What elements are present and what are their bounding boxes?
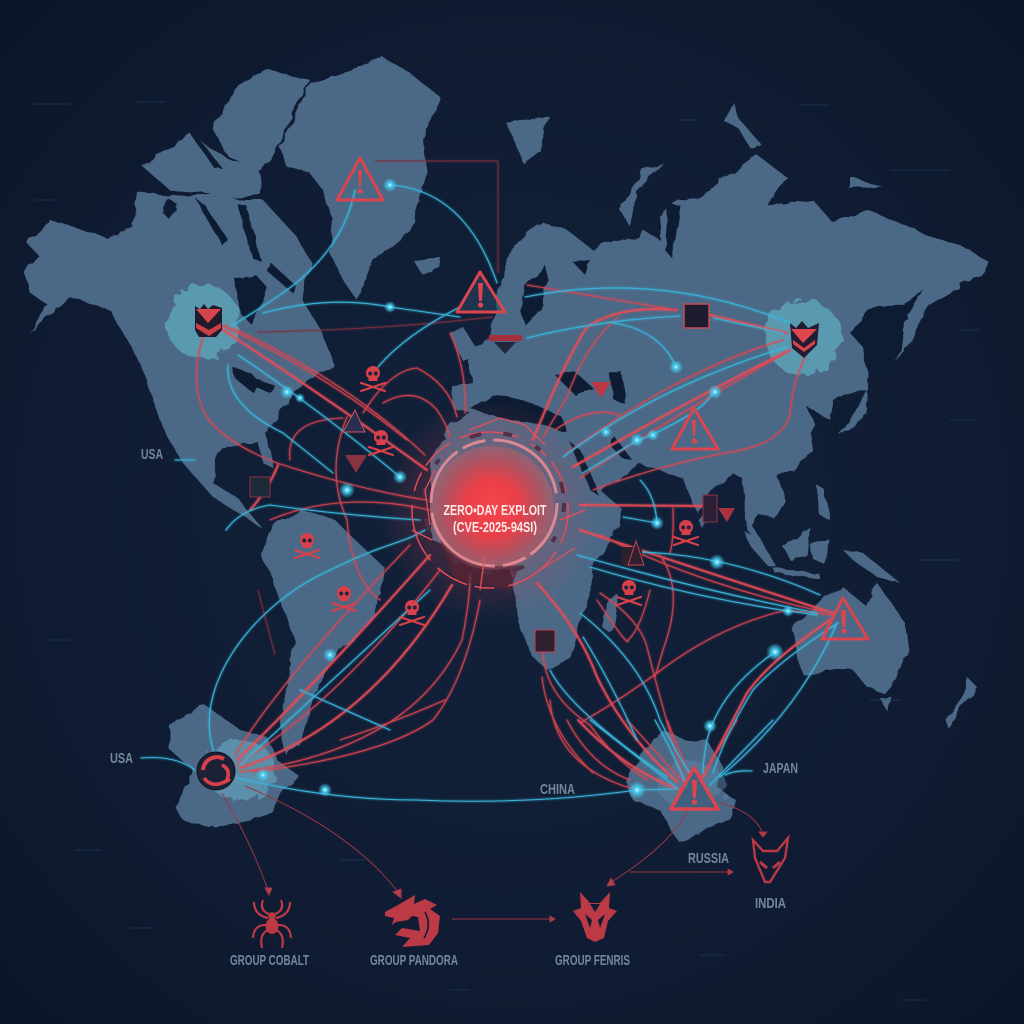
threat badge: North America <box>195 304 222 337</box>
arrow to Group Pandora <box>245 786 401 898</box>
continents <box>24 57 990 843</box>
threat badge: Asia <box>790 321 819 358</box>
marker: Atlantic diamond <box>343 410 365 432</box>
marker: Caucasus triangle <box>591 382 611 398</box>
route nodes <box>256 178 794 799</box>
central exploit burst <box>412 418 585 590</box>
Africa <box>430 405 623 670</box>
warning: southeast hub <box>671 768 718 809</box>
Hudson Bay <box>234 276 265 325</box>
connector arrows <box>222 786 767 922</box>
Great Lakes <box>232 367 275 392</box>
marker: Europe <box>489 335 522 354</box>
arrow to Group Fenris <box>607 812 687 886</box>
skull: Indian Ocean <box>674 520 698 545</box>
marker: East Africa square <box>622 541 644 566</box>
group icons <box>253 838 788 948</box>
CVE identifier: (CVE-2025-94SI) <box>453 520 537 536</box>
arrow to India fox <box>720 803 767 837</box>
core <box>430 446 554 570</box>
Madagascar <box>602 593 618 633</box>
skull: Mid Atlantic <box>369 430 393 455</box>
Sri Lanka <box>700 516 708 529</box>
arrow near Russia label <box>630 869 733 875</box>
attack routes: cyan <box>141 185 838 801</box>
marker: Africa square <box>535 630 555 652</box>
hub glow: North America <box>166 285 240 359</box>
New Zealand <box>946 677 978 728</box>
New Guinea <box>843 550 900 583</box>
hub glow: Asia <box>765 299 841 375</box>
South America <box>262 510 385 755</box>
Severnaya Zemlya <box>723 102 760 148</box>
southeast landmass <box>627 730 738 843</box>
label: Group Cobalt: GROUP COBALT <box>230 952 309 969</box>
Ellesmere Island <box>213 70 310 172</box>
southwest landmass <box>170 705 300 828</box>
skull: Brazil north <box>295 533 319 558</box>
lower shadow <box>440 540 520 590</box>
outer broken ring <box>412 432 568 588</box>
marker: Caribbean square <box>250 477 270 497</box>
skull: Madagascar <box>617 580 641 605</box>
Novaya Zemlya <box>620 163 663 227</box>
Kara Sea inlet <box>665 205 680 258</box>
skull: Brazil south <box>332 586 356 611</box>
warning: Australia <box>822 598 868 639</box>
label: India: INDIA <box>755 895 786 912</box>
hub glow: southwest <box>204 740 276 800</box>
Eurasia <box>453 155 990 550</box>
arrow to Group Cobalt <box>222 793 272 895</box>
central exploit halo <box>380 400 600 620</box>
hub glow: southeast <box>658 761 726 809</box>
label: USA south: USA <box>110 750 133 767</box>
label: Group Pandora: GROUP PANDORA <box>370 952 458 969</box>
United Kingdom <box>450 327 480 360</box>
White Sea <box>573 260 590 275</box>
Mediterranean Sea <box>470 395 567 432</box>
Caspian Sea <box>610 372 624 403</box>
Baltic Sea <box>520 265 548 325</box>
Sea of Japan <box>830 395 862 440</box>
label: Japan: JAPAN <box>763 760 798 777</box>
marker: Atlantic triangle <box>345 455 367 473</box>
circuit traces <box>412 418 585 590</box>
warning: Scandinavia <box>457 272 505 312</box>
New Siberian Islands <box>850 177 883 189</box>
Okhotsk Sea <box>850 290 923 380</box>
icon: Pandora dragon <box>385 895 440 947</box>
Svalbard <box>507 117 550 163</box>
text labels <box>110 446 798 969</box>
icon: Cobalt spider <box>253 900 291 948</box>
icon: India fox outline <box>753 838 788 882</box>
exploit name: ZERO▪DAY EXPLOIT <box>444 503 547 519</box>
Arctic channels <box>162 133 295 292</box>
Philippines and Sulawesi <box>810 485 830 565</box>
threat badge: southwest round emblem <box>197 752 235 790</box>
Tasmania <box>880 698 893 712</box>
Japan <box>838 390 867 438</box>
inverted triangle and square markers <box>250 304 735 652</box>
warning: Central Asia <box>672 408 718 449</box>
Sumatra <box>743 530 777 567</box>
North America <box>24 192 335 528</box>
warning: Greenland <box>337 158 383 200</box>
skull: North Atlantic <box>361 366 385 391</box>
Arctic islands <box>143 133 262 198</box>
inner fragments <box>424 433 564 573</box>
warning triangles <box>337 158 868 809</box>
label: Group Fenris: GROUP FENRIS <box>555 952 630 969</box>
world map <box>24 57 990 843</box>
marker: Bay of Bengal triangle <box>718 508 735 522</box>
Persian Gulf <box>610 437 632 460</box>
inland seas and bays <box>162 133 923 497</box>
skull markers <box>295 366 698 625</box>
Iceland <box>413 257 440 275</box>
Greenland <box>280 57 440 300</box>
bright ring <box>431 440 557 566</box>
attack routes: red <box>196 161 833 790</box>
icon: Fenris wolf <box>573 892 617 942</box>
marker: India square <box>703 495 717 522</box>
skull: South Atlantic <box>400 600 424 625</box>
label: USA north: USA <box>141 446 163 463</box>
arrow Pandora to Fenris <box>452 916 555 922</box>
marker: Asia square <box>684 304 709 328</box>
label: China: CHINA <box>540 781 575 798</box>
exploit label <box>444 503 547 536</box>
Java <box>773 568 820 579</box>
Borneo <box>783 527 810 560</box>
Black Sea <box>557 372 593 395</box>
Australia <box>793 583 908 693</box>
label: Russia: RUSSIA <box>688 850 729 867</box>
Red Sea <box>570 442 600 497</box>
